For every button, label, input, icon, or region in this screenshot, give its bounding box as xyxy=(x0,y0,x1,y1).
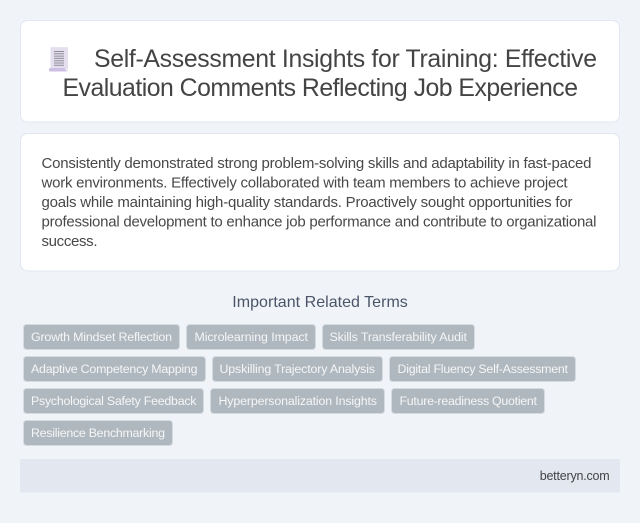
text block: evaluation comment xyxy=(40,155,596,250)
tag: upskilling trajectory analysis: Upskilling Trajectory Analysis xyxy=(220,362,375,376)
tag: skills transferability audit xyxy=(322,324,474,350)
text block: evaluation comment: professional development to enhance job performance and contribute to organizational xyxy=(42,214,596,230)
tag: psychological safety feedback: Psychological Safety Feedback xyxy=(31,394,197,408)
tag: future-readiness quotient: Future-readiness Quotient xyxy=(400,394,538,408)
tag: skills transferability audit: Skills Transferability Audit xyxy=(330,330,468,344)
tag: future-readiness quotient xyxy=(392,388,544,414)
tag: upskilling trajectory analysis xyxy=(212,356,382,382)
tag list xyxy=(24,324,576,446)
tag: growth mindset reflection: Growth Mindset Reflection xyxy=(31,330,172,344)
text block: evaluation comment: Consistently demonstrated strong problem-solving skills and adaptability in fast-paced xyxy=(42,155,592,172)
tag: hyperpersonalization insights: Hyperpersonalization Insights xyxy=(218,394,377,408)
panel: title card xyxy=(20,20,620,122)
text block: evaluation comment: goals while maintaining high-quality standards. Proactively sought opportunities for xyxy=(42,194,572,211)
panel: assessment summary card xyxy=(20,134,620,271)
tag: resilience benchmarking xyxy=(24,420,172,446)
tag: growth mindset reflection xyxy=(24,324,180,350)
footer source text: betteryn.com xyxy=(540,469,610,483)
tag: digital fluency self-assessment: Digital Fluency Self-Assessment xyxy=(398,362,569,376)
tag: digital fluency self-assessment xyxy=(390,356,576,382)
icon: paper scroll xyxy=(49,47,68,72)
title: Self-Assessment Insights for Training: Effective xyxy=(94,46,597,73)
tag: resilience benchmarking: Resilience Benchmarking xyxy=(31,426,165,440)
tag: microlearning impact xyxy=(186,324,316,350)
title xyxy=(62,46,597,102)
tag: adaptive competency mapping: Adaptive Competency Mapping xyxy=(31,362,198,376)
tag: microlearning impact: Microlearning Impact xyxy=(194,330,309,344)
footer bar xyxy=(20,459,620,492)
tag: psychological safety feedback xyxy=(24,388,204,414)
tag: hyperpersonalization insights xyxy=(210,388,384,414)
text block: evaluation comment: work environments. Effectively collaborated with team members to achieve project xyxy=(40,174,568,192)
text block: evaluation comment: success. xyxy=(42,233,98,250)
title: Evaluation Comments Reflecting Job Experience xyxy=(62,75,578,102)
tag: adaptive competency mapping xyxy=(24,356,206,382)
heading: important related terms: Important Related Terms xyxy=(232,294,408,311)
